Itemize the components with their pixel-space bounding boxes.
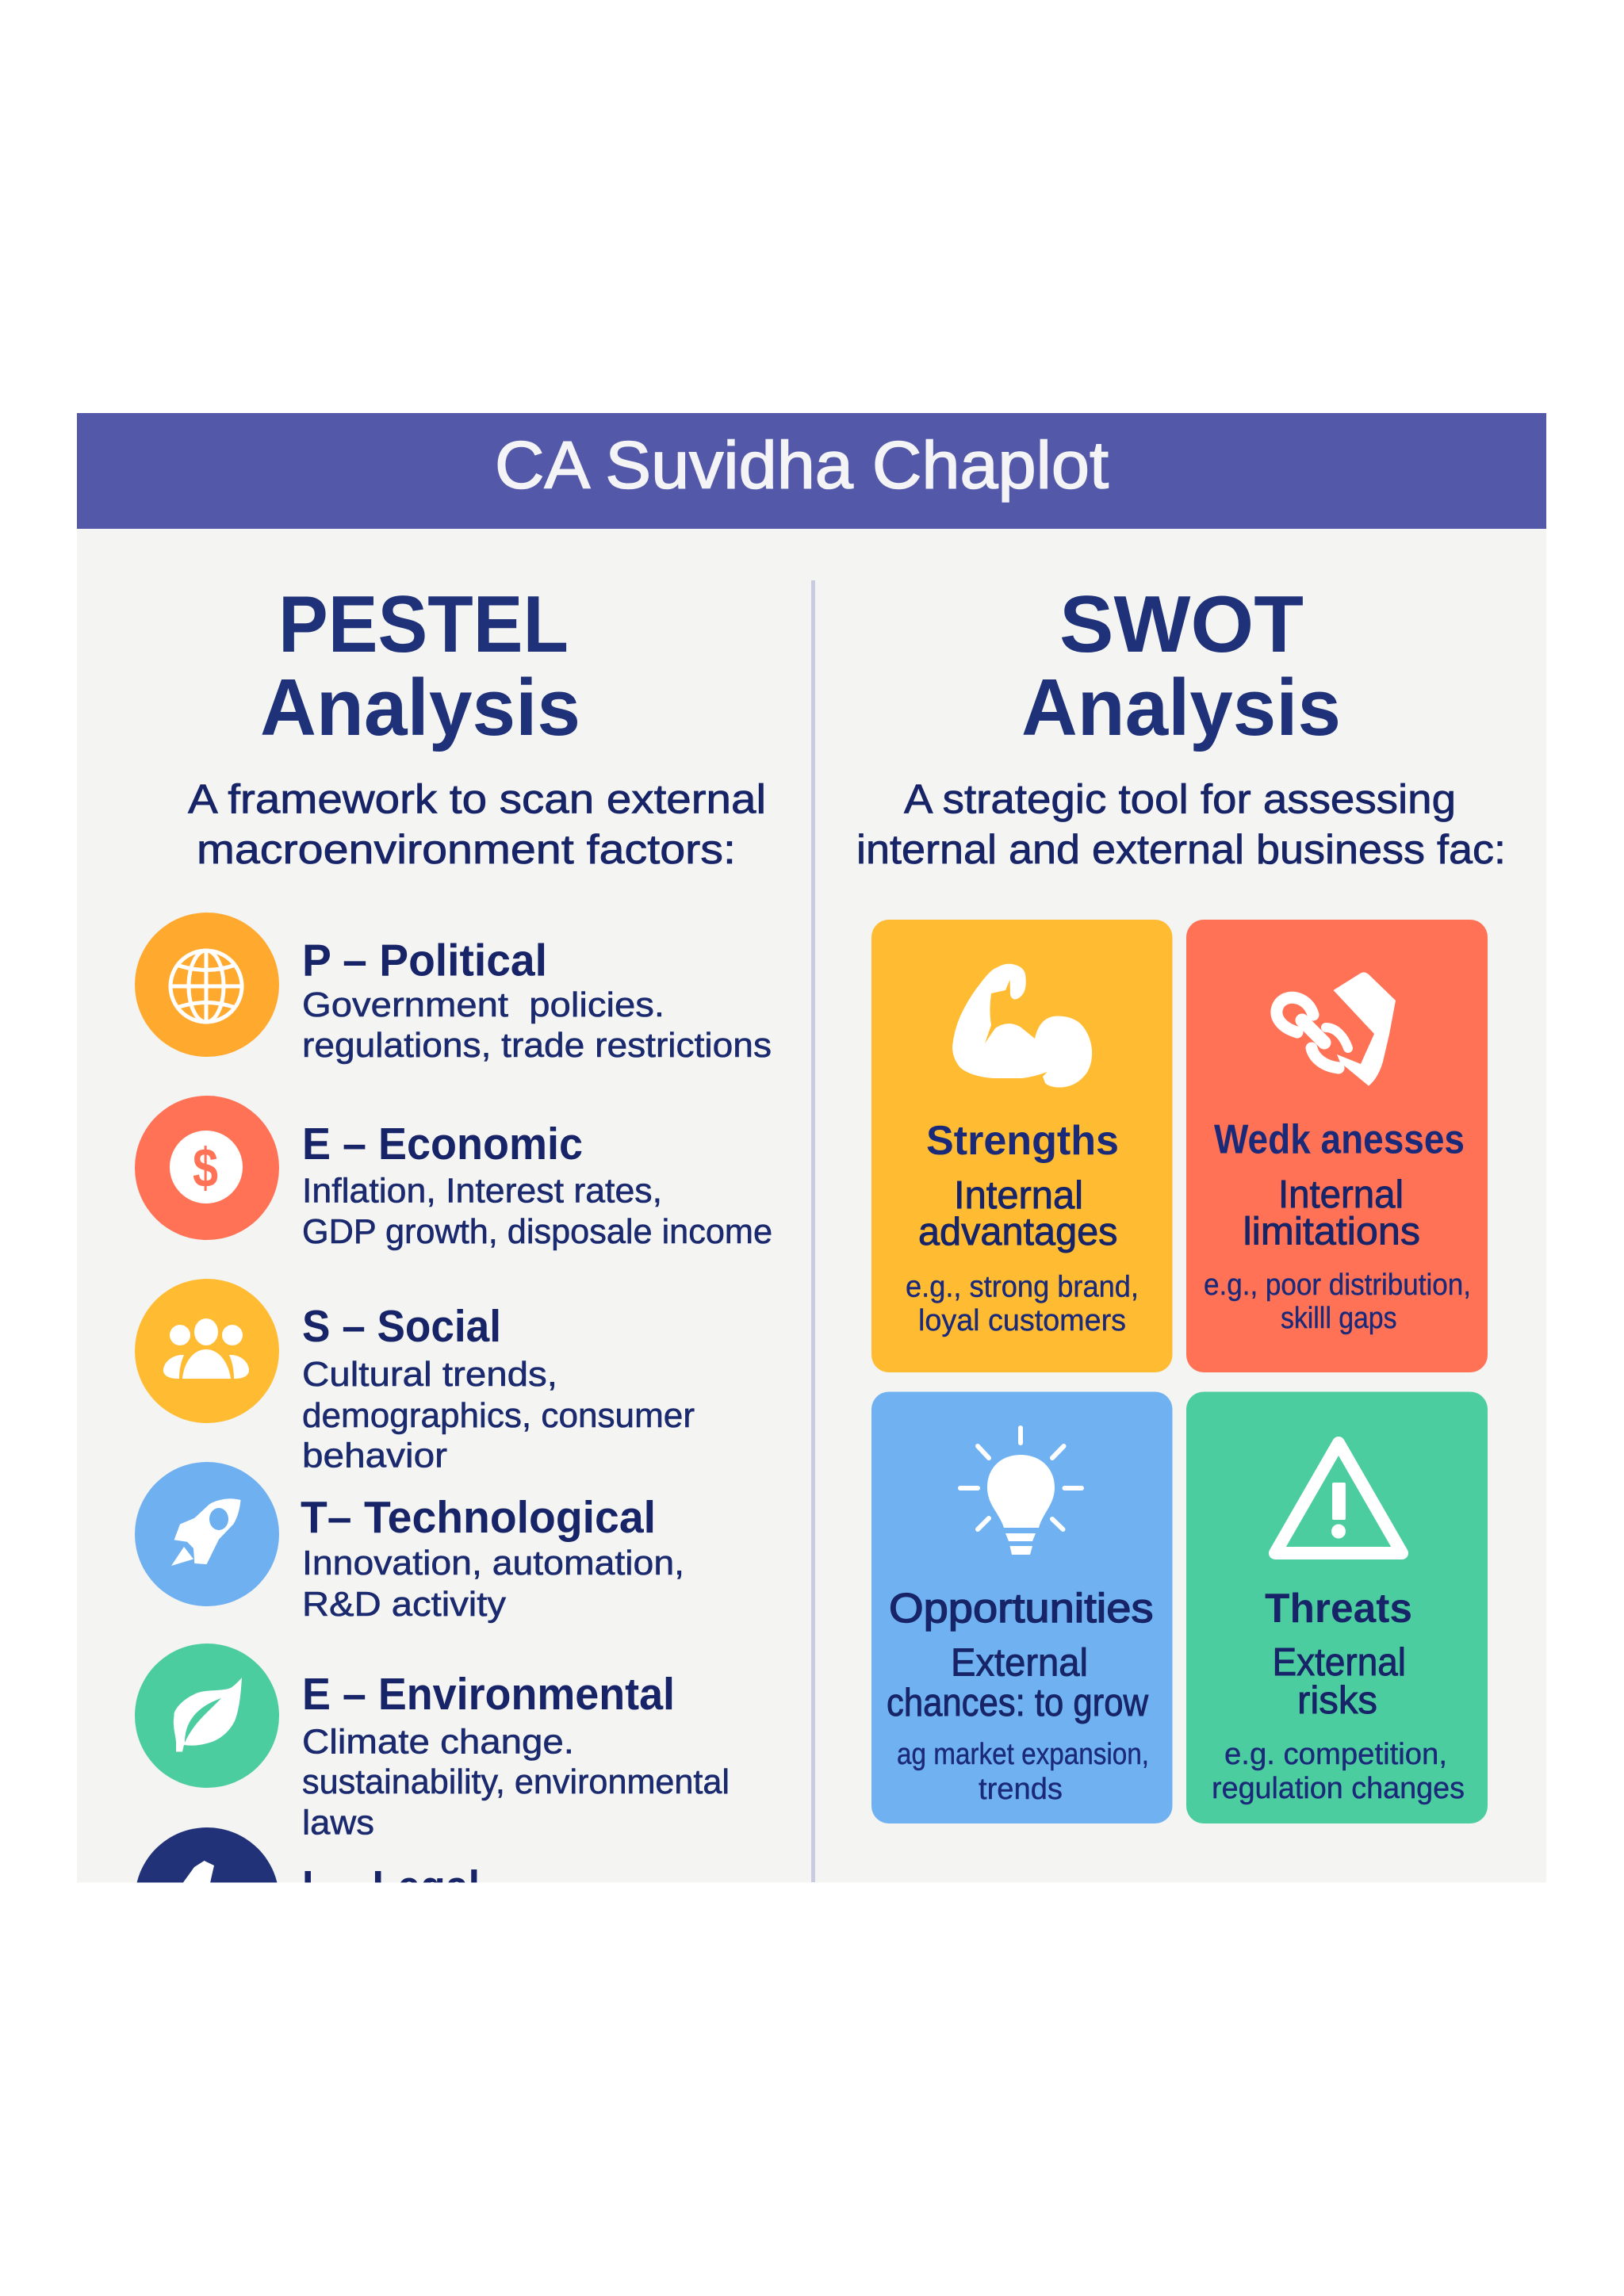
Strengths text (906, 1118, 1139, 1337)
Economic text: GDP growth, disposale income (302, 1212, 772, 1251)
Threats text: Threats (1265, 1586, 1412, 1632)
Technological text (301, 1492, 684, 1624)
Opportunities text: Opportunities (889, 1586, 1153, 1632)
Strengths text: e.g., strong brand, (906, 1270, 1139, 1303)
Weaknesses text: Wedk anesses (1214, 1116, 1465, 1162)
Social text (302, 1301, 695, 1475)
title: CA Suvidha Chaplot (495, 428, 1109, 503)
Opportunities text: trends (979, 1773, 1063, 1806)
Strengths text: loyal customers (918, 1304, 1126, 1337)
item: Social (135, 1279, 695, 1475)
Opportunities text: External (951, 1641, 1088, 1684)
Social text: behavior (302, 1437, 447, 1475)
card: Threats (1186, 1392, 1488, 1823)
Weaknesses text: skilll gaps (1281, 1302, 1397, 1335)
Political text: regulations, trade restrictions (302, 1026, 772, 1065)
card: Weaknesses (1186, 920, 1488, 1372)
Opportunities text: ag market expansion, (897, 1738, 1149, 1771)
item: Technological (135, 1462, 684, 1624)
Strengths text: advantages (918, 1211, 1118, 1253)
card: Strengths (871, 920, 1172, 1372)
Economic text: Inflation, Interest rates, (302, 1172, 662, 1210)
Weaknesses text: limitations (1243, 1210, 1420, 1253)
Threats text: External (1272, 1641, 1406, 1684)
PESTEL subtitle (187, 783, 764, 864)
item: Environmental (135, 1644, 730, 1843)
panel: SWOT analysis (856, 580, 1506, 1823)
icon: people group (135, 1279, 279, 1423)
Environmental text: sustainability, environmental (302, 1762, 730, 1801)
Weaknesses text (1204, 1116, 1471, 1335)
icon: light bulb (960, 1428, 1082, 1555)
icon: dollar coin (135, 1096, 279, 1240)
Environmental text: Climate change. (302, 1722, 574, 1762)
Political text (302, 936, 772, 1065)
Legal text: L – Legal (302, 1862, 480, 1912)
icon: legal (136, 1827, 278, 1882)
PESTEL subtitle: macroenvironment factors: (197, 827, 736, 873)
Economic text (302, 1119, 772, 1251)
Weaknesses text: e.g., poor distribution, (1204, 1269, 1471, 1302)
icon: warning triangle (1275, 1443, 1402, 1553)
SWOT subtitle: A strategic tool for assessing (904, 777, 1456, 823)
Political text: P – Political (302, 936, 547, 986)
main panel background (77, 529, 1546, 1882)
SWOT subtitle: internal and external business fac: (856, 827, 1506, 873)
Social text: Cultural trends, (302, 1355, 557, 1394)
header banner (77, 413, 1546, 529)
Threats text (1212, 1586, 1465, 1805)
icon: leaf (135, 1644, 279, 1788)
icon: dollar coin: $ (193, 1137, 218, 1199)
Opportunities text (887, 1586, 1153, 1806)
Technological text: T– Technological (301, 1492, 656, 1543)
Social text: demographics, consumer (302, 1396, 695, 1435)
heading: SWOT Analysis: SWOT (1059, 580, 1304, 669)
item: Political (135, 913, 772, 1065)
icon: broken chain (1277, 972, 1396, 1086)
Threats text: e.g. competition, (1224, 1738, 1447, 1771)
heading: PESTEL Analysis (262, 595, 577, 752)
PESTEL subtitle: A framework to scan external (188, 777, 766, 823)
heading: SWOT Analysis (1021, 580, 1341, 752)
heading: PESTEL Analysis: PESTEL (278, 580, 569, 669)
heading: SWOT Analysis: Analysis (1021, 664, 1341, 752)
item: Legal (136, 1827, 477, 1882)
Technological text: Innovation, automation, (302, 1544, 684, 1582)
Opportunities text: chances: to grow (887, 1682, 1149, 1724)
Environmental text: laws (302, 1803, 374, 1843)
Weaknesses text: Internal (1278, 1173, 1404, 1216)
Environmental text (302, 1669, 730, 1843)
SWOT subtitle (856, 777, 1506, 873)
Technological text: R&D activity (302, 1585, 506, 1624)
icon: globe (135, 913, 279, 1057)
Threats text: risks (1297, 1679, 1377, 1722)
Strengths text: Internal (954, 1174, 1083, 1217)
Economic text: E – Economic (302, 1119, 583, 1169)
Threats text: regulation changes (1212, 1772, 1465, 1805)
Strengths text: Strengths (926, 1118, 1119, 1164)
item: Economic (135, 1096, 772, 1251)
icon: rocket (135, 1462, 279, 1606)
heading: PESTEL Analysis: Analysis (260, 664, 580, 752)
card: Opportunities (871, 1392, 1172, 1823)
Political text: Government policies. (302, 985, 665, 1024)
Environmental text: E – Environmental (302, 1669, 675, 1720)
icon: flexed arm (952, 964, 1092, 1088)
panel: PESTEL analysis (135, 580, 772, 1972)
Social text: S – Social (302, 1301, 501, 1352)
